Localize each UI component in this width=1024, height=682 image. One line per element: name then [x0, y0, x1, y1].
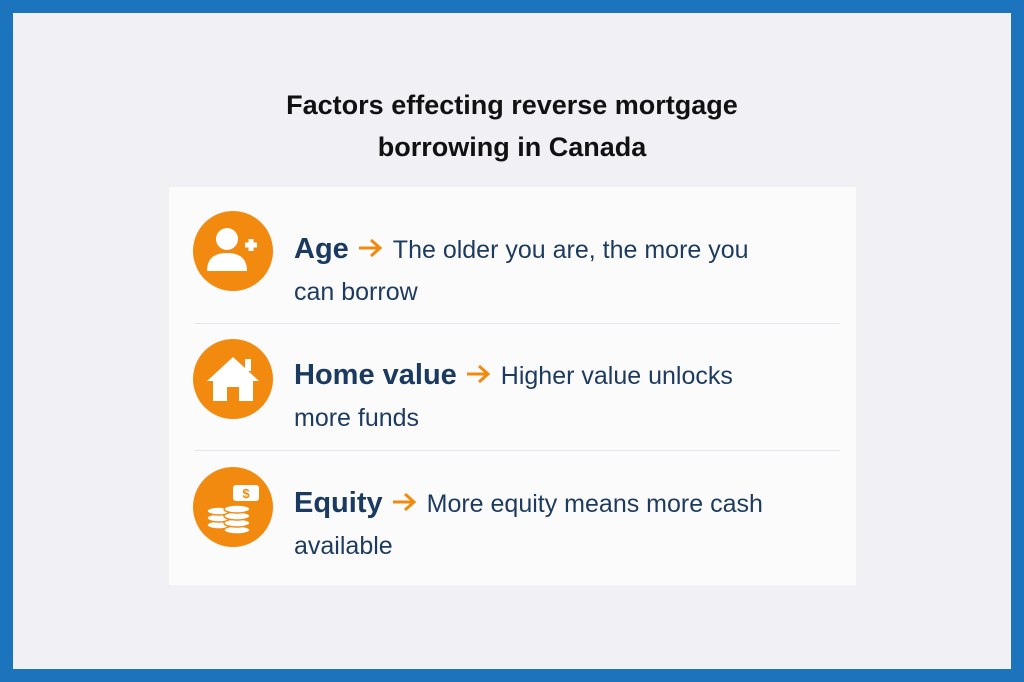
- title: [286, 90, 738, 162]
- row: home value: [193, 339, 733, 432]
- icon: coins: [193, 467, 273, 547]
- title: Factors effecting reverse mortgage: [286, 90, 738, 120]
- icon: coins: $: [242, 486, 250, 501]
- panel: factors: [169, 187, 856, 585]
- text: equity: Equity More equity means more cash available: [294, 487, 763, 560]
- title: borrowing in Canada: [378, 132, 646, 162]
- row: age: [193, 211, 749, 306]
- icon: person plus: [193, 211, 273, 291]
- icon: house: [193, 339, 273, 419]
- text: age: Age The older you are, the more you can borrow: [294, 233, 749, 306]
- text: home value: Home value Higher value unlocks more funds: [294, 359, 733, 432]
- row: equity: [193, 467, 763, 560]
